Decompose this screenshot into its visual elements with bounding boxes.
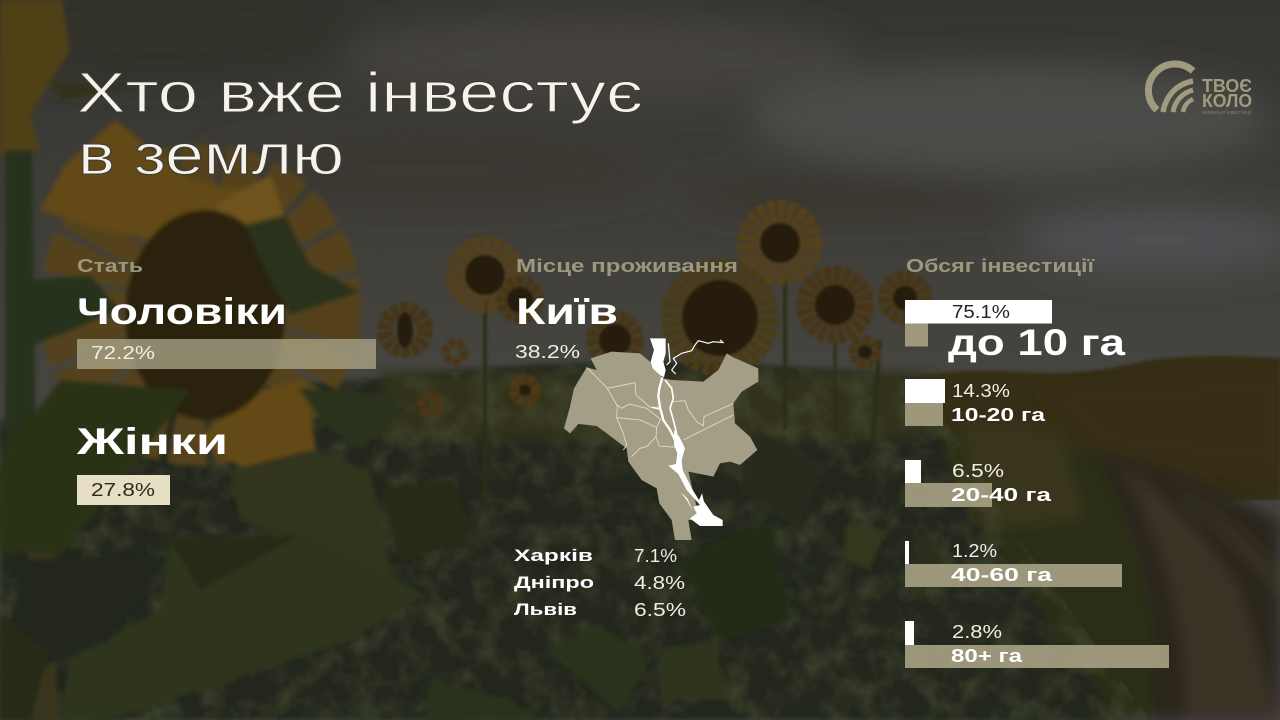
row: 40-60 ha: 40-60 га xyxy=(951,565,1053,585)
tree line and field on the right xyxy=(900,356,1280,500)
top-left flower and twig xyxy=(0,0,70,155)
heading: residence: Місце проживання xyxy=(516,256,738,276)
logo icon: circle arcs xyxy=(1148,64,1193,112)
large sunflower xyxy=(40,120,318,475)
panel: residence xyxy=(514,256,758,620)
other cities table xyxy=(514,546,686,620)
leaves xyxy=(0,380,190,555)
logo: Твоє Коло: КОЛО xyxy=(1202,91,1252,111)
row: 10-20 ha: 10-20 га xyxy=(951,405,1046,425)
row: up to 10 ha: до 10 га xyxy=(948,322,1126,363)
map of Kyiv xyxy=(564,338,758,540)
row: 80+ ha xyxy=(905,621,1169,668)
map: district borders xyxy=(587,367,733,457)
other cities table: 4.8% xyxy=(634,573,685,593)
row: 80+ ha: 2.8% xyxy=(952,622,1002,642)
foliage mass xyxy=(0,362,1120,720)
stems xyxy=(485,280,880,500)
Kyiv share: 38.2% xyxy=(515,342,580,362)
other cities table: Львів xyxy=(514,600,577,619)
row: 10-20 ha xyxy=(905,379,1046,426)
row: 40-60 ha xyxy=(905,541,1122,587)
row: 40-60 ha: 1.2% xyxy=(952,541,997,561)
row: 20-40 ha: 6.5% xyxy=(952,461,1004,481)
panel: gender xyxy=(76,256,376,505)
left stem xyxy=(5,150,36,450)
logo: Твоє Коло xyxy=(1148,64,1253,116)
logo: Твоє Коло: земельні інвестиції xyxy=(1202,110,1253,116)
other cities table: Дніпро xyxy=(514,573,594,592)
other cities table: 7.1% xyxy=(634,546,677,566)
title: Хто вже інвестує xyxy=(77,61,643,125)
heading: investment size: Обсяг інвестиції xyxy=(906,256,1095,276)
women bar xyxy=(77,475,170,505)
map: Dnipro river xyxy=(650,338,723,526)
panel: investment size xyxy=(905,256,1169,668)
row: up to 10 ha: 75.1% xyxy=(952,302,1010,322)
row: 80+ ha: 80+ га xyxy=(951,646,1023,666)
Kyiv label: Київ xyxy=(516,291,618,332)
other cities table: Харків xyxy=(514,546,593,565)
small sunflowers xyxy=(385,212,924,414)
other cities table: 6.5% xyxy=(634,600,686,620)
row: 20-40 ha xyxy=(905,460,1052,507)
title: в землю xyxy=(78,123,344,187)
women label: Жінки xyxy=(76,421,228,462)
men bar xyxy=(77,339,376,369)
logo: Твоє Коло: ТВОЄ xyxy=(1202,76,1252,96)
women bar: 27.8% xyxy=(91,480,155,500)
heading: gender: Стать xyxy=(77,256,143,276)
men label: Чоловіки xyxy=(77,291,287,332)
title xyxy=(77,61,643,187)
row: 20-40 ha: 20-40 га xyxy=(951,485,1052,505)
map: city silhouette xyxy=(564,352,758,540)
row: 10-20 ha: 14.3% xyxy=(952,381,1010,401)
men bar: 72.2% xyxy=(91,343,155,363)
row: up to 10 ha xyxy=(905,300,1126,363)
